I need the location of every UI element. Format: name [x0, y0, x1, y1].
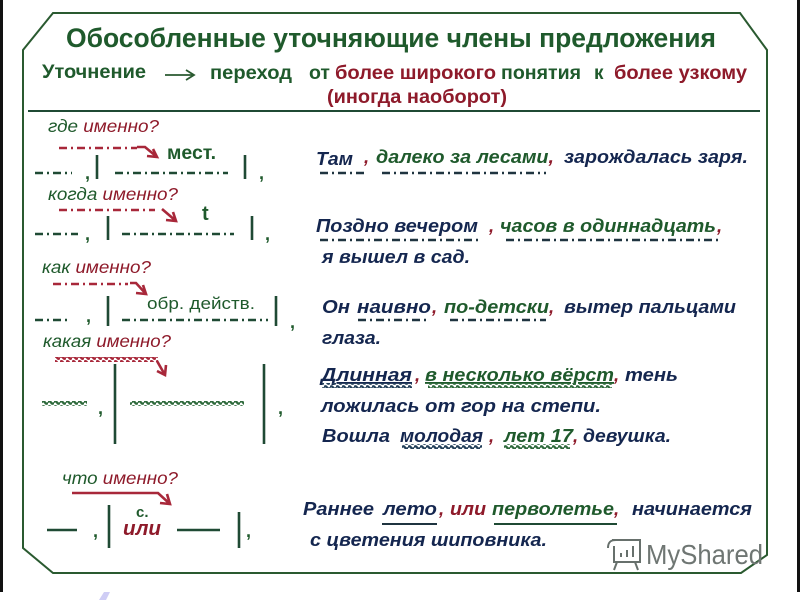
row 4: scheme	[42, 331, 283, 444]
definition text	[42, 62, 747, 108]
row 4: example: ,	[613, 364, 619, 385]
row 4: example: молодая	[400, 425, 483, 446]
row 3: example: Он	[322, 296, 350, 317]
row 5: scheme: с.	[136, 504, 149, 521]
row 4: example: ложилась от гор на степи.	[320, 395, 601, 416]
row 4: example: ,	[572, 425, 578, 446]
row 1: example: зарождалась заря.	[564, 146, 748, 167]
row 1: example: ,	[363, 146, 369, 167]
row 4: example: ,	[488, 425, 494, 446]
row 2: example: часов в одиннадцать	[500, 215, 716, 236]
row 4: scheme: ,	[278, 398, 283, 418]
row 1: scheme: где именно?	[48, 116, 159, 136]
row 5: example: начинается	[632, 498, 752, 519]
row 5: example: или	[450, 498, 486, 519]
row 3: example: наивно	[357, 296, 431, 317]
row 4: example: в несколько вёрст	[425, 364, 614, 385]
title: Обособленные уточняющие члены предложения	[66, 23, 716, 53]
row 1: scheme: мест.	[167, 143, 216, 164]
row 5: example: ,	[438, 498, 444, 519]
row 2: scheme	[35, 184, 270, 244]
row 2: scheme: когда именно?	[48, 184, 178, 204]
row 2: scheme: t	[202, 203, 209, 225]
row 4: example: лет 17	[503, 425, 575, 446]
row 4: scheme: ,	[98, 398, 103, 418]
row 3: example: глаза.	[322, 327, 381, 348]
row 5: example: с цветения шиповника.	[310, 529, 547, 550]
decorative smudge	[99, 592, 110, 600]
row 5: example: ,	[613, 498, 619, 519]
row 3: example: ,	[431, 296, 437, 317]
row 5: example: лето	[382, 498, 437, 519]
row 4: scheme: какая именно?	[43, 331, 171, 351]
definition text: Уточнение	[42, 62, 146, 83]
row 3: example: по-детски	[444, 296, 549, 317]
row 5: scheme: что именно?	[62, 468, 178, 488]
row 5: scheme: или	[123, 518, 161, 540]
row 3: example: вытер пальцами	[564, 296, 736, 317]
row 5: scheme: ,	[246, 521, 251, 541]
row 1: example: Там	[316, 148, 353, 169]
row 2: example: ,	[716, 215, 722, 236]
row 5: example: Раннее	[303, 498, 374, 519]
definition text: (иногда наоборот)	[327, 87, 507, 108]
row 4: example: ,	[414, 364, 420, 385]
row 2: example	[316, 215, 722, 267]
row 3: example	[322, 296, 736, 348]
row 1: scheme: ,	[85, 163, 90, 183]
row 1: example: далеко за лесами ,	[376, 146, 554, 167]
row 3: scheme	[35, 257, 295, 332]
row 1: scheme	[35, 116, 264, 183]
definition text: к	[594, 63, 604, 84]
row 5: scheme	[47, 468, 251, 548]
row 1: example	[316, 146, 748, 173]
definition text: переход	[210, 63, 292, 84]
arrow: definition	[165, 70, 194, 80]
row 3: scheme: ,	[86, 306, 91, 326]
row 2: example: Поздно вечером	[316, 215, 478, 236]
row 3: scheme: обр. действ.	[147, 295, 255, 313]
definition text: более узкому	[614, 63, 747, 84]
row 2: scheme: ,	[265, 224, 270, 244]
watermark: MyShared: MyShared	[646, 539, 763, 570]
row 3: scheme: как именно?	[42, 257, 151, 277]
row 5: example	[303, 498, 752, 550]
definition text: от	[309, 63, 330, 84]
row 2: example: ,	[488, 215, 494, 236]
row 4: example: тень	[625, 364, 678, 385]
row 3: example: ,	[548, 296, 554, 317]
row 3: scheme: ,	[290, 312, 295, 332]
row 2: scheme: ,	[85, 224, 90, 244]
definition text: более широкого	[335, 63, 496, 84]
definition text: понятия	[501, 63, 581, 84]
row 4: example: девушка.	[583, 425, 671, 446]
row 4: example: Вошла	[322, 425, 390, 446]
row 5: example: перволетье	[492, 498, 614, 519]
row 4: example	[319, 364, 678, 449]
row 2: example: я вышел в сад.	[321, 246, 470, 267]
row 4: example: Длинная	[319, 364, 412, 385]
row 1: scheme: ,	[259, 163, 264, 183]
row 5: scheme: ,	[93, 521, 98, 541]
